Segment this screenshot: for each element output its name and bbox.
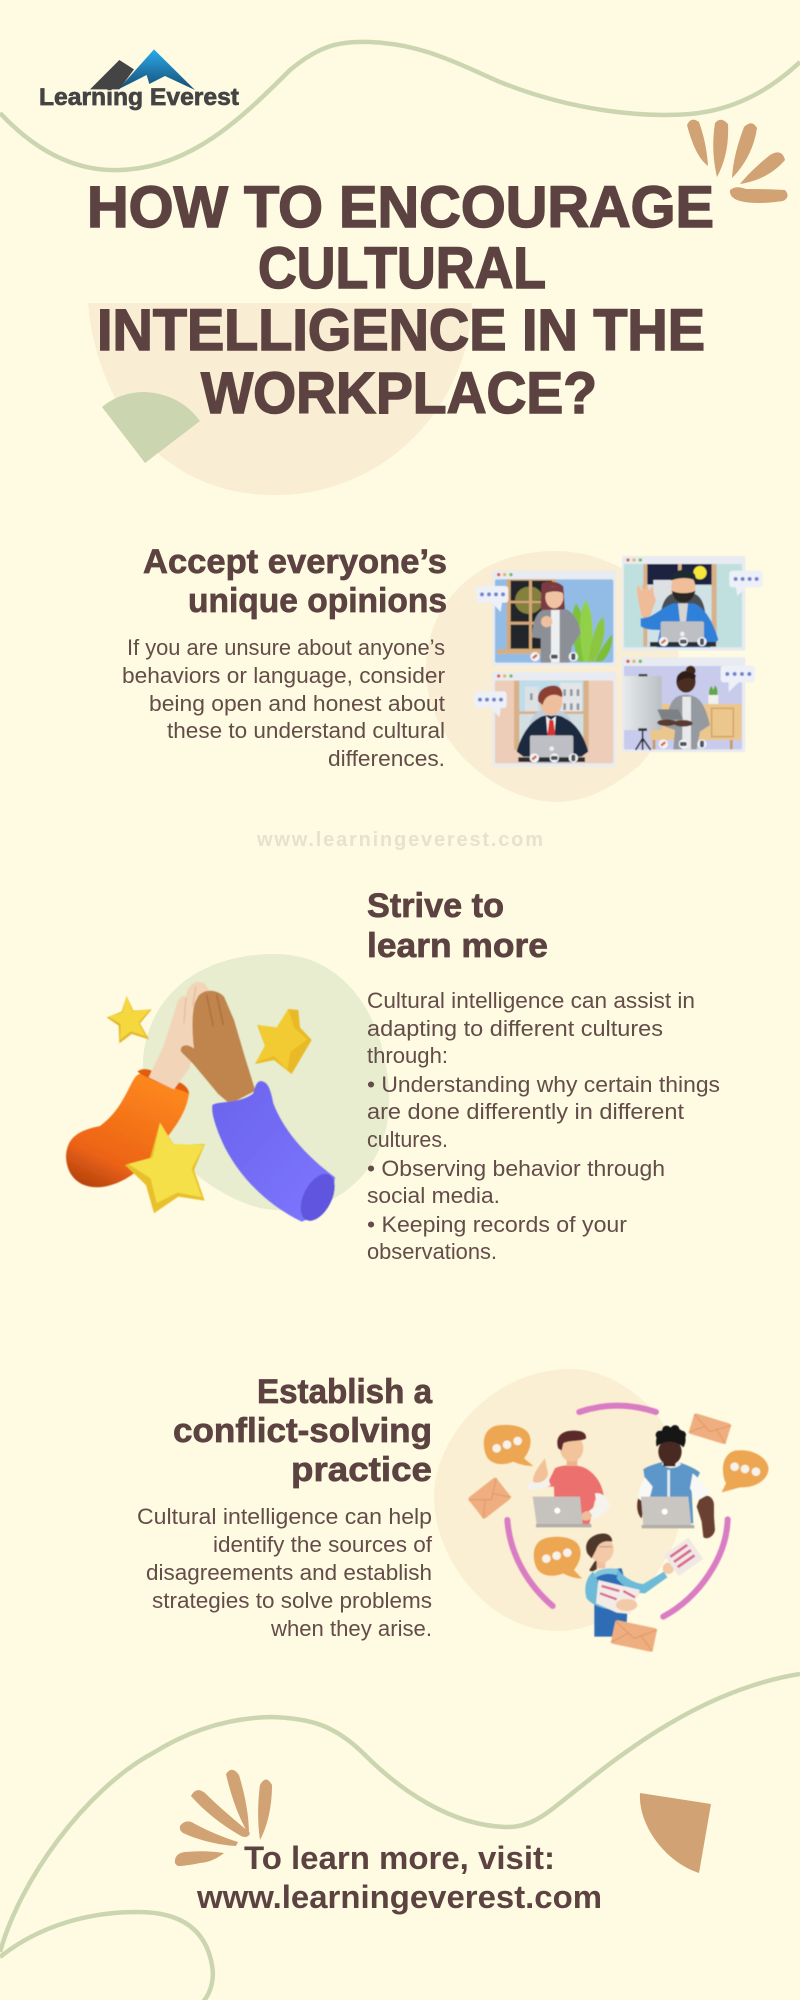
section 1 heading: [143, 543, 447, 620]
hand: light skin: [149, 982, 211, 1089]
section 2 body text: observations.: [367, 1239, 497, 1264]
decorative curve: bottom large: [0, 1674, 800, 1952]
section 2 body text: adapting to different cultures: [367, 1016, 663, 1041]
video window: man in navy suit: [493, 672, 616, 767]
hand: brown skin: [181, 991, 255, 1104]
chat bubble: man in navy suit: [474, 691, 507, 717]
section 2 body text: Cultural intelligence can assist in: [367, 988, 695, 1013]
section 2 body text: [367, 988, 720, 1264]
section 1 body text: [122, 635, 445, 771]
section 1 body text: being open and honest about: [149, 691, 445, 716]
chat bubble: centre: [534, 1537, 582, 1579]
section 3 body text: Cultural intelligence can help: [137, 1504, 432, 1529]
section 3 body text: disagreements and establish: [146, 1560, 432, 1585]
envelope: top right: [688, 1413, 732, 1445]
section 2 body text: cultures.: [367, 1127, 448, 1152]
section 2 body text: are done differently in different: [367, 1099, 684, 1124]
title: [87, 175, 714, 426]
envelope: left: [467, 1477, 512, 1519]
green fan shape: [102, 392, 200, 463]
envelope: bottom: [611, 1620, 657, 1652]
person: man in red shirt: [528, 1431, 610, 1527]
video window: woman with plant: [493, 571, 616, 666]
logo: Learning Everest: [39, 49, 239, 111]
section 1 body text: these to understand cultural: [167, 718, 445, 743]
footer call to action: To learn more, visit:: [244, 1840, 555, 1876]
chat bubble: top left: [484, 1425, 533, 1466]
star: bottom: [125, 1123, 205, 1213]
section 2 heading: [367, 887, 548, 965]
section 1 heading: unique opinions: [188, 582, 447, 620]
section 3 body text: identify the sources of: [213, 1532, 433, 1557]
decorative curve: bottom small loop: [0, 1912, 213, 2000]
section 3 body text: when they arise.: [270, 1616, 432, 1641]
section 2 green blob: [143, 954, 389, 1210]
chat bubble: top right: [722, 1450, 768, 1492]
section 2 body text: • Keeping records of your: [367, 1212, 627, 1237]
arm: purple sleeve: [212, 1081, 342, 1226]
logo wordmark: Learning Everest: [39, 84, 239, 111]
section 2 heading: Strive to: [367, 887, 504, 925]
section 1 heading: Accept everyone’s: [143, 543, 447, 581]
section 2 body text: through:: [367, 1043, 448, 1068]
person: man in blue vest: [637, 1425, 715, 1538]
chat bubble: woman with tablet: [721, 666, 755, 692]
chat bubble: bearded man: [729, 571, 763, 596]
section 3 body text: strategies to solve problems: [152, 1588, 432, 1613]
beige half-ellipse behind title: [88, 303, 472, 495]
section 3 heading: practice: [291, 1451, 432, 1489]
title: CULTURAL: [258, 236, 546, 301]
illustration: high five: [66, 982, 342, 1226]
section 3 heading: Establish a: [257, 1373, 433, 1411]
arm: orange sleeve: [66, 1069, 189, 1187]
document: raised paper: [664, 1538, 703, 1576]
tan fan shape: [640, 1793, 711, 1873]
star: top left: [107, 996, 152, 1043]
title: HOW TO ENCOURAGE: [87, 175, 714, 240]
title: WORKPLACE?: [201, 361, 597, 426]
section 1 body text: differences.: [328, 746, 445, 771]
section 1 body text: behaviors or language, consider: [122, 663, 445, 688]
chat bubble: woman: [476, 586, 508, 612]
section 2 body text: • Understanding why certain things: [367, 1072, 720, 1097]
illustration: team collaboration: [467, 1406, 768, 1652]
star: right: [255, 1009, 312, 1074]
section 1 blob: [426, 551, 679, 802]
video window: woman with tablet: [622, 657, 745, 752]
footer call to action: www.learningeverest.com: [196, 1879, 602, 1915]
section 3 blob: [434, 1369, 682, 1631]
illustration: video call windows: [474, 556, 763, 767]
section 2 heading: learn more: [367, 927, 548, 965]
title: INTELLIGENCE IN THE: [97, 298, 705, 363]
video window: bearded man: [622, 556, 745, 651]
starburst: top right: [687, 120, 788, 203]
decorative curve: top: [0, 42, 800, 170]
pink arcs: [507, 1406, 728, 1617]
section 2 body text: • Observing behavior through: [367, 1156, 665, 1181]
section 1 body text: If you are unsure about anyone’s: [127, 635, 445, 660]
footer call to action: [196, 1840, 602, 1915]
section 2 body text: social media.: [367, 1183, 500, 1208]
person: woman with documents: [585, 1534, 674, 1637]
section 3 heading: [173, 1373, 433, 1489]
icon: mountains: [90, 49, 195, 90]
section 3 body text: [137, 1504, 433, 1641]
watermark url: www.learningeverest.com: [256, 829, 543, 851]
starburst: footer: [175, 1770, 272, 1866]
section 3 heading: conflict-solving: [173, 1412, 432, 1450]
